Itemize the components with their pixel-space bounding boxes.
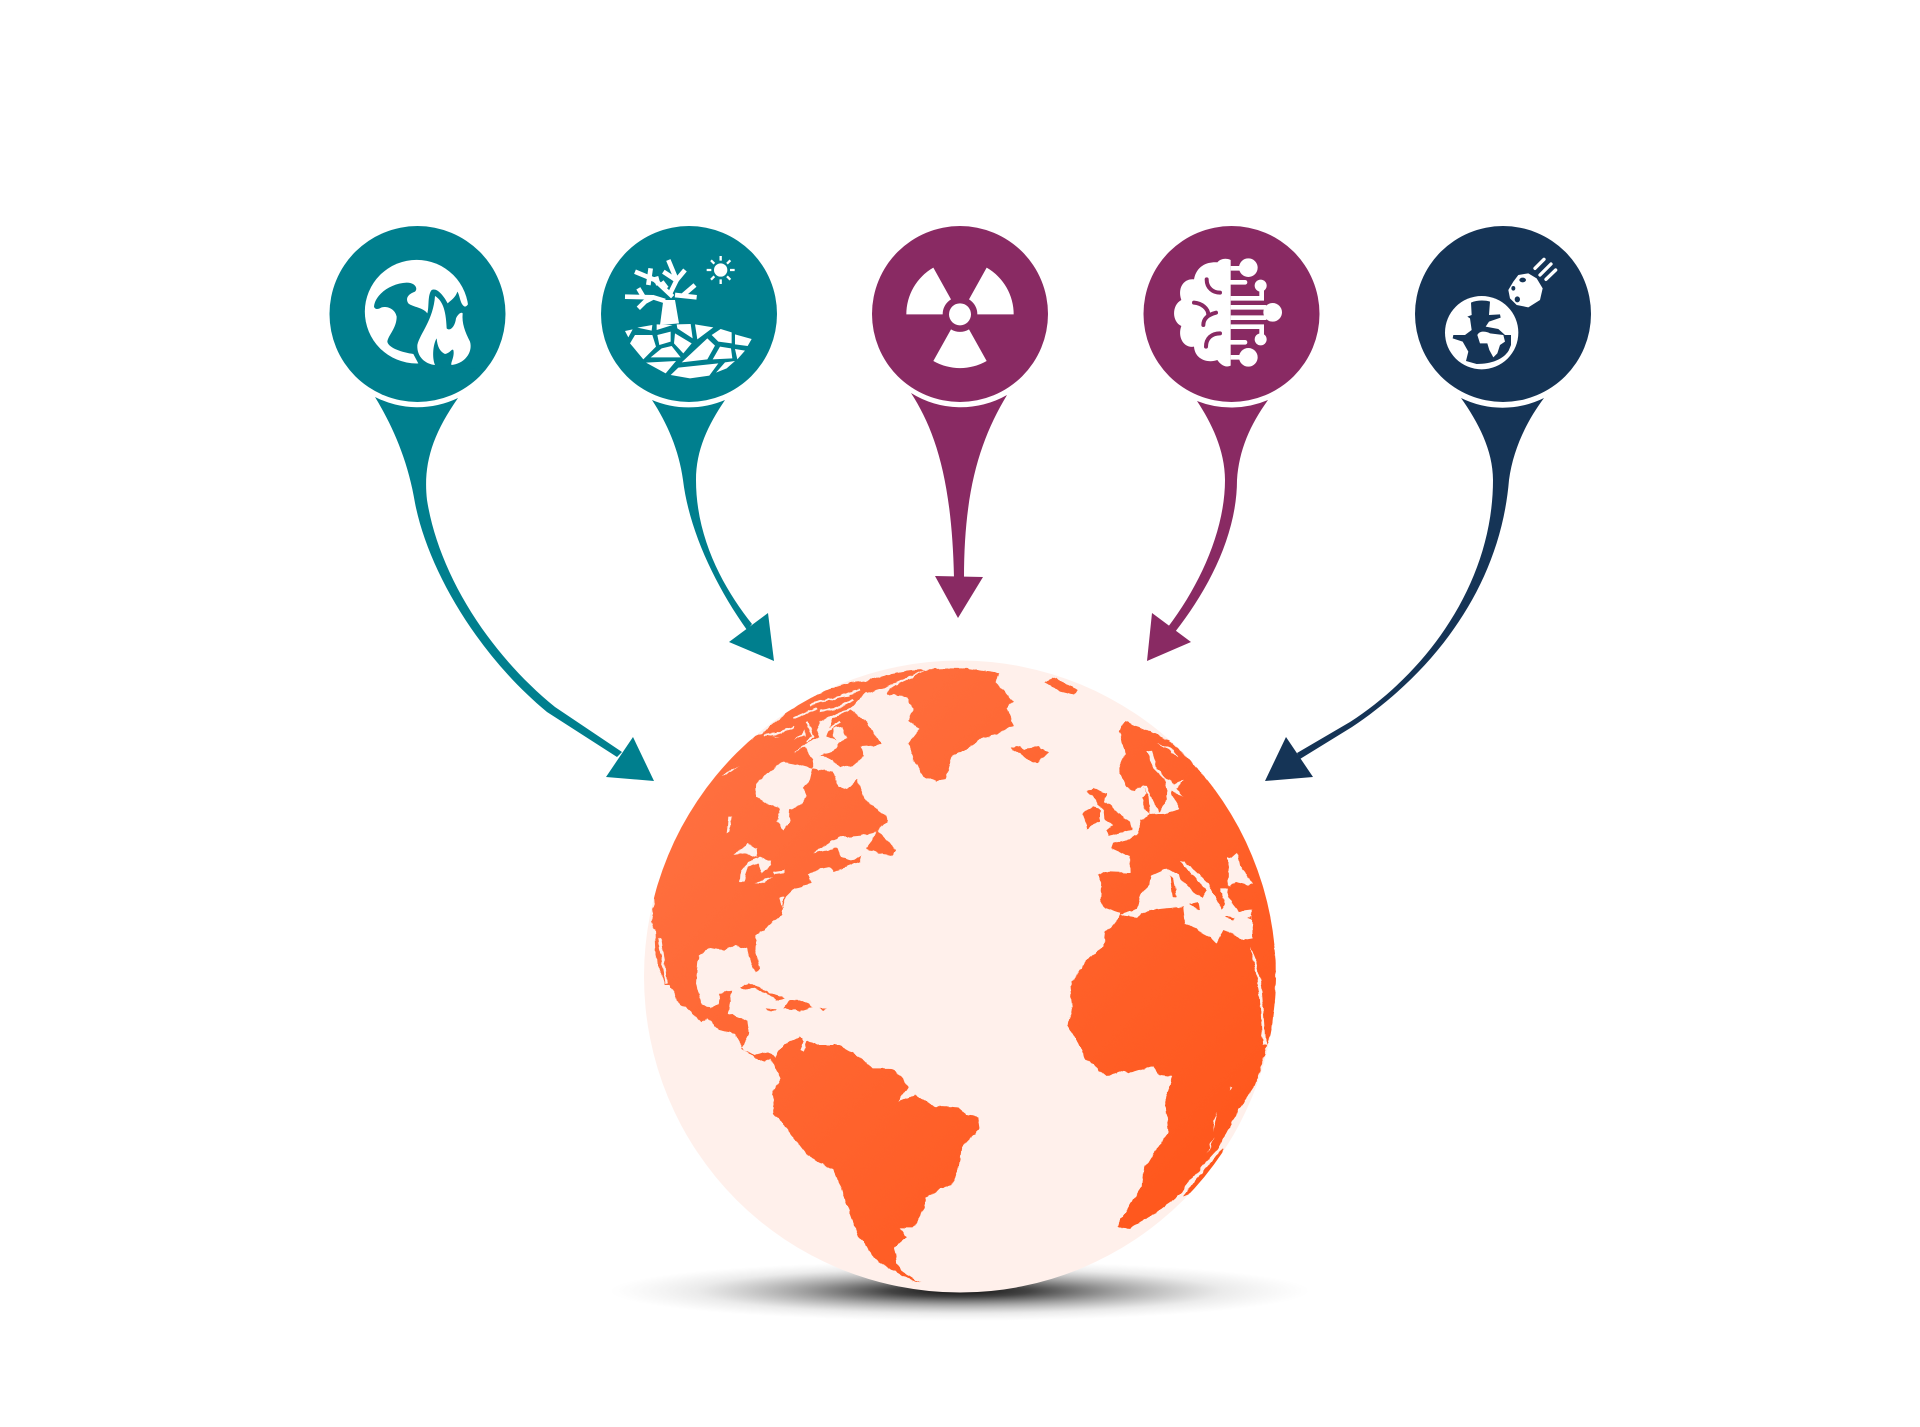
globe shadow [610, 1261, 1310, 1321]
arrowhead [1147, 613, 1191, 661]
pin head [601, 226, 777, 402]
continents [652, 668, 1276, 1283]
pin: artificial intelligence [1144, 226, 1320, 661]
globe [644, 660, 1276, 1292]
stem and curved arrow shaft [1297, 398, 1544, 759]
pin: asteroid [1265, 226, 1591, 781]
icon: brain circuit [1174, 258, 1282, 367]
Greenland [887, 668, 1013, 782]
pin head [330, 226, 506, 402]
pin head [1144, 226, 1320, 402]
icon: earth on fire [365, 260, 475, 368]
stem and curved arrow shaft [375, 397, 622, 757]
pin head [1415, 226, 1591, 402]
globe ocean disc [644, 660, 1276, 1292]
icon: asteroid approaching earth [1445, 259, 1556, 369]
pin: drought [601, 226, 777, 661]
Old World [1012, 678, 1276, 1228]
pin head [872, 226, 1048, 402]
pin: wildfire [330, 226, 654, 781]
seas [1120, 743, 1267, 1153]
stem and arrow shaft [911, 393, 1007, 578]
arrowhead [606, 737, 654, 781]
arrowhead [729, 613, 774, 661]
stem and curved arrow shaft [652, 400, 752, 630]
islands [1012, 678, 1252, 1197]
pin: nuclear [872, 226, 1048, 618]
Arctic channels [763, 690, 860, 742]
arrowhead [935, 576, 983, 618]
stem and curved arrow shaft [1168, 400, 1268, 632]
South America [767, 1037, 980, 1283]
arrowhead [1265, 737, 1313, 781]
icon: dead tree and cracked earth [625, 256, 752, 378]
icon: radiation trefoil [906, 268, 1014, 368]
Eurasia and Africa [1067, 721, 1276, 1228]
Hudson Bay and lakes [658, 727, 853, 983]
North and Central America [652, 670, 925, 1062]
